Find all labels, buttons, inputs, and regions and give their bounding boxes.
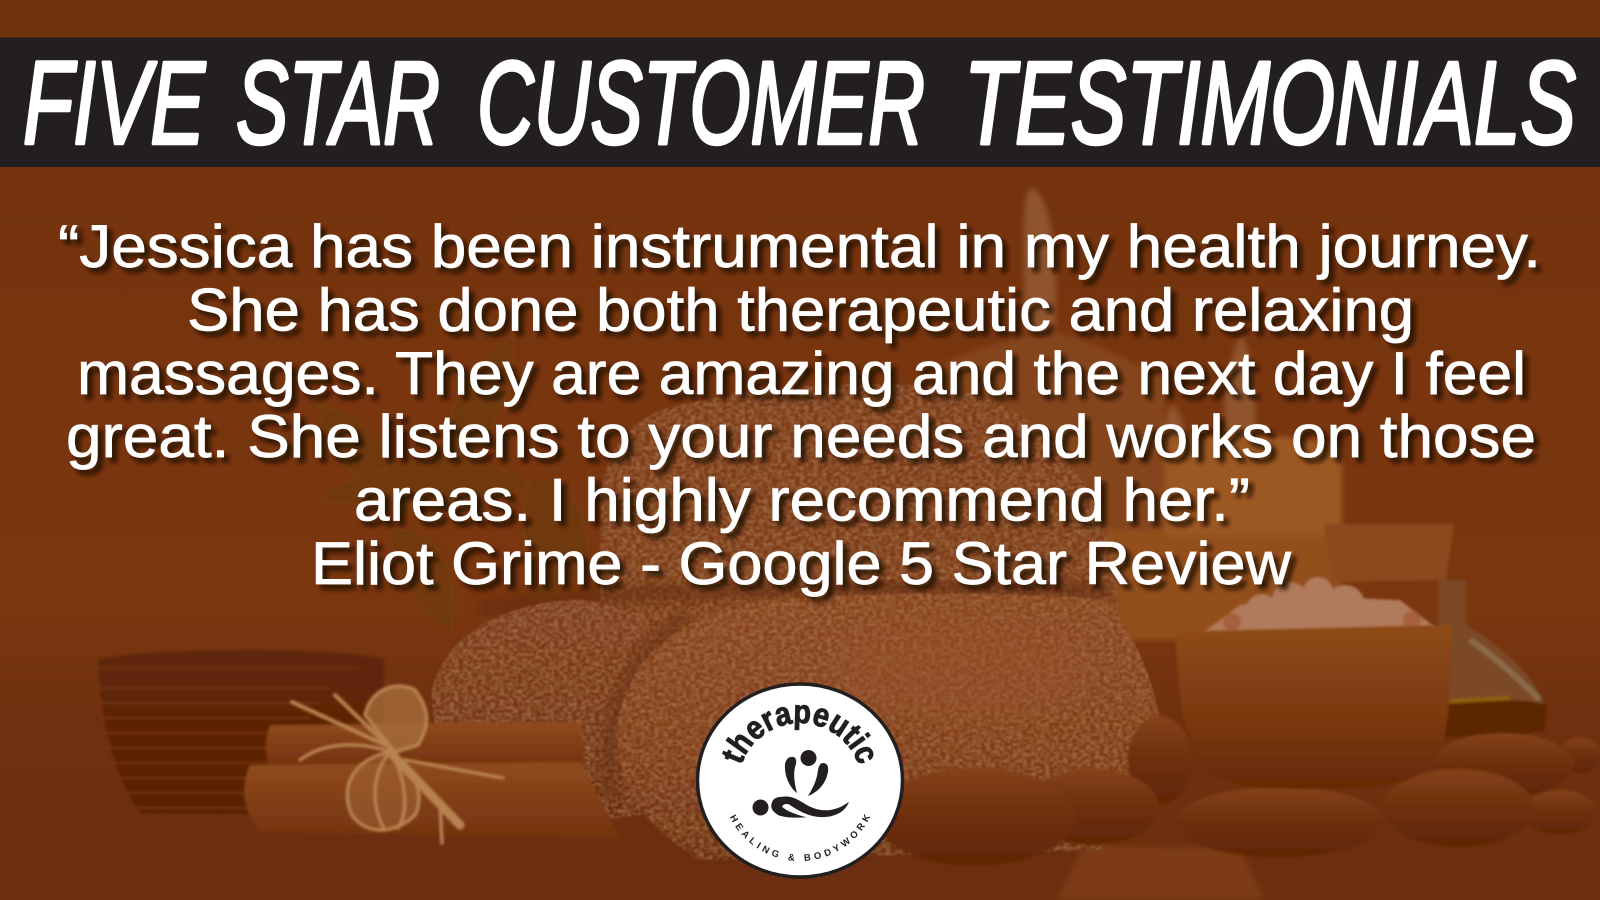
salt bowl [1175, 625, 1451, 788]
title text: CUSTOMER [477, 38, 925, 170]
leaves [315, 335, 590, 630]
cork and bottle [1324, 524, 1547, 737]
logo tagline: HEALING & BODYWORK [730, 814, 870, 861]
testimonial quote: She has done both therapeutic and relaxing [187, 276, 1414, 344]
testimonial quote [58, 213, 1541, 597]
logo badge [696, 682, 904, 879]
raffia bow [292, 686, 503, 843]
testimonial quote: areas. I highly recommend her.” [354, 466, 1250, 534]
logo wordmark: therapeutic [722, 704, 874, 764]
cinnamon sticks [244, 722, 620, 838]
title text: STAR [236, 38, 440, 170]
candles [945, 333, 1342, 640]
salt in bowl [1204, 577, 1436, 632]
logo massage icon [752, 750, 849, 818]
testimonial quote: “Jessica has been instrumental in my health journey. [58, 213, 1541, 280]
lower rolled towels [432, 600, 680, 830]
shadow under upper towel [480, 587, 1110, 610]
seam between towels [609, 615, 690, 800]
testimonial quote: Eliot Grime - Google 5 Star Review [311, 530, 1292, 597]
testimonial quote: massages. They are amazing and the next day I feel [77, 340, 1526, 407]
dark pot with ridges [98, 650, 384, 815]
upper rolled towel [600, 384, 1120, 640]
title text [23, 38, 1576, 170]
testimonial quote: great. She listens to your needs and works on those [66, 403, 1536, 470]
towel highlight [830, 615, 1090, 725]
title banner [0, 38, 1600, 170]
table surface highlight [1056, 845, 1264, 900]
river stones [875, 716, 1600, 866]
candle flames [1024, 188, 1255, 472]
title text: FIVE [23, 38, 206, 170]
